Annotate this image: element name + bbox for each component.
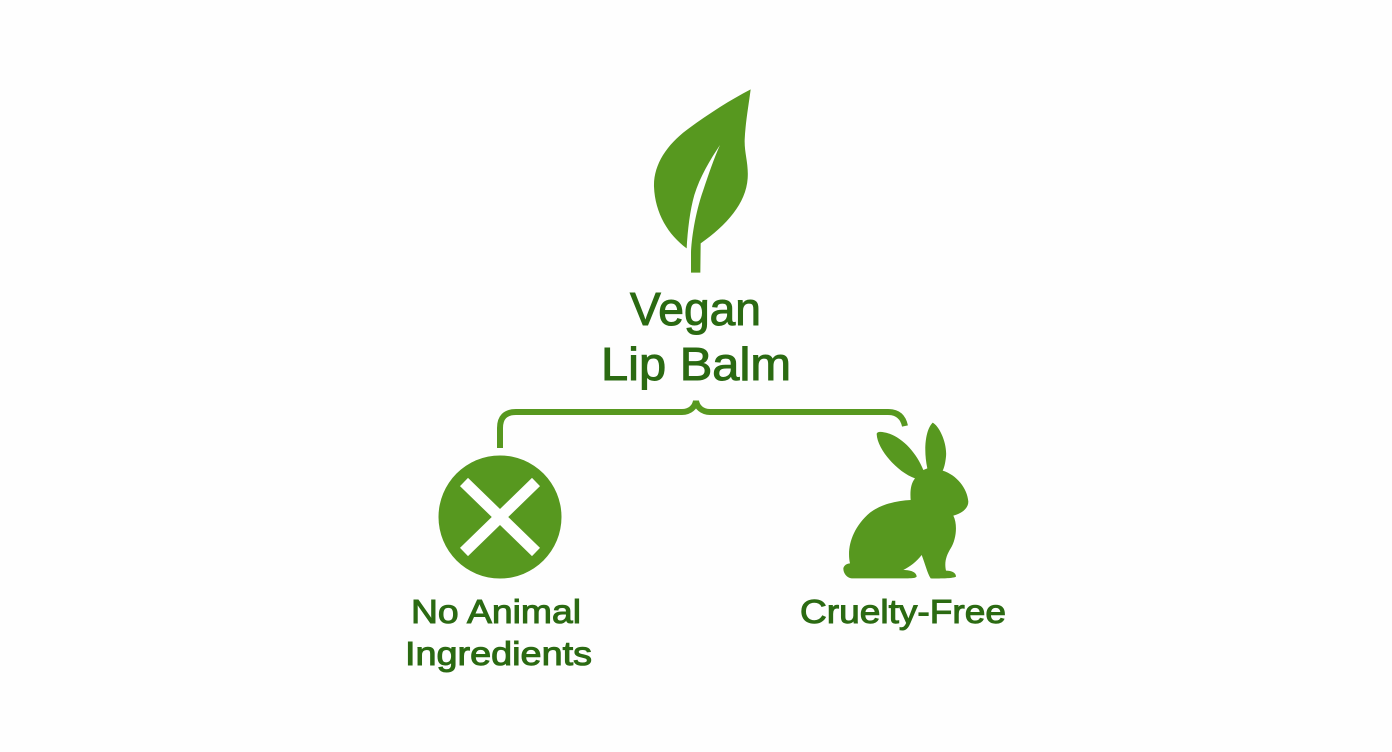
label: No Animal Ingredients: Ingredients (405, 635, 592, 672)
title: Vegan Lip Balm: Vegan (630, 283, 761, 335)
label: No Animal Ingredients (405, 593, 592, 672)
bracket connector (500, 401, 905, 448)
icon: rabbit (843, 423, 968, 578)
icon: leaf (654, 89, 751, 273)
label: No Animal Ingredients: No Animal (411, 593, 581, 630)
icon: crossed circle (438, 456, 562, 578)
title: Vegan Lip Balm (601, 283, 791, 390)
label: Cruelty-Free: Cruelty-Free (800, 593, 1006, 630)
title: Vegan Lip Balm: Lip Balm (601, 338, 791, 390)
